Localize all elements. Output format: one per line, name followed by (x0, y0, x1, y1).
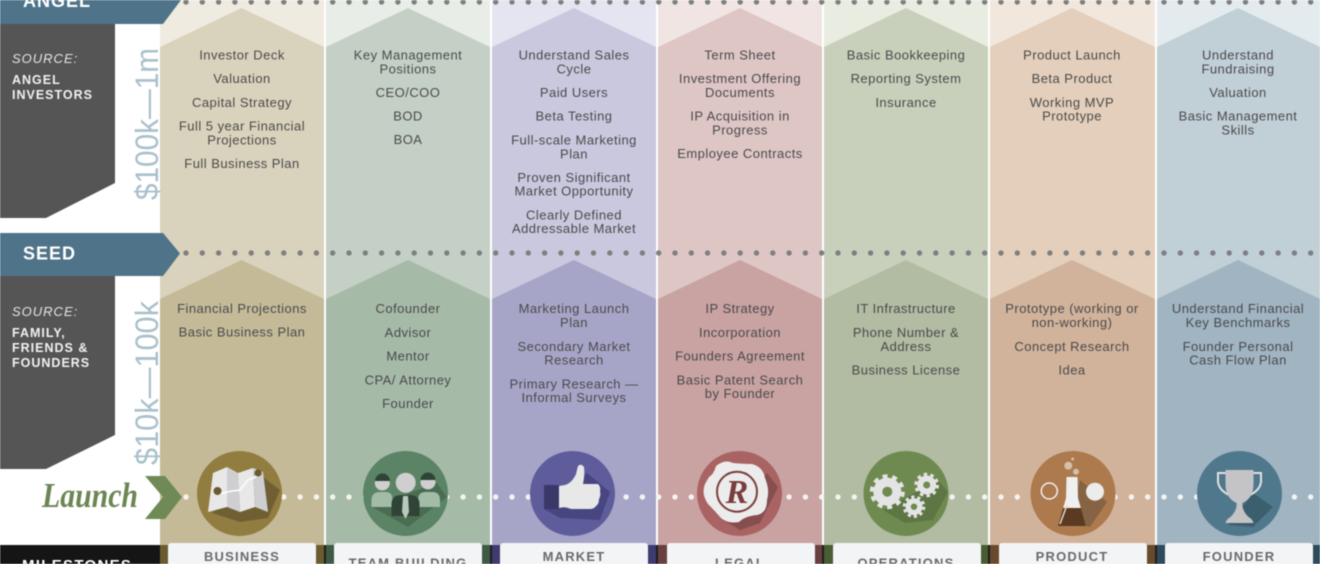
text: market research seed items: Informal Surveys (521, 390, 627, 405)
text: market research angel items: Proven Significant (517, 170, 631, 185)
text: market research angel items: Plan (560, 146, 588, 162)
text: market research angel items: Paid Users (540, 85, 608, 100)
card: market: MARKET (543, 549, 605, 564)
panel: angel source: INVESTORS (12, 88, 93, 102)
card: business: BUSINESS (204, 549, 280, 564)
text: team building seed items: Founder (382, 396, 434, 411)
text: team building angel items: BOA (394, 132, 422, 147)
text: operations angel items: Insurance (875, 95, 937, 110)
text: team building seed items: Mentor (386, 348, 430, 364)
text: business plan seed items: Basic Business Plan (179, 324, 305, 340)
text: operations seed items: IT Infrastructure (856, 301, 956, 316)
column: operations (824, 0, 988, 545)
text: legal seed items: IP Strategy (705, 301, 775, 316)
text: market research angel items: Beta Testing (536, 108, 612, 124)
panel: angel source (0, 24, 115, 218)
banner: angel (0, 0, 181, 24)
text: market research seed items: Plan (560, 315, 588, 330)
text: product seed items: non-working) (1032, 315, 1112, 330)
text: team building seed items: CPA/ Attorney (365, 372, 451, 388)
panel: angel source: SOURCE: (12, 51, 78, 66)
card: business (168, 543, 316, 564)
card: legal (667, 543, 815, 564)
text: legal angel items: IP Acquisition in (690, 108, 790, 124)
text: product seed items: Idea (1058, 362, 1086, 378)
bar: milestones (0, 545, 160, 564)
text: operations seed items: Phone Number & (853, 325, 959, 340)
icon: team (363, 451, 448, 536)
icon: map (197, 451, 282, 536)
dotted line: angel stage (186, 0, 1320, 5)
text: legal angel items (677, 48, 803, 161)
text: market research angel items (511, 48, 637, 236)
text: market research seed items: Research (544, 352, 604, 368)
milestone strips (160, 545, 1320, 564)
text: team building angel items: BOD (393, 108, 423, 124)
icon: flask (1030, 451, 1116, 536)
text: legal seed items: Basic Patent Search (677, 372, 803, 388)
text: founder angel items: Skills (1221, 122, 1255, 138)
label: launch: Launch (41, 476, 138, 515)
text: team building angel items: Key Management (354, 48, 462, 62)
icon: thumbs up (530, 451, 615, 536)
text: legal angel items: Employee Contracts (677, 146, 803, 161)
text: market research seed items (509, 301, 639, 405)
text: product seed items (1005, 301, 1139, 378)
icon: gears (864, 451, 948, 536)
text: legal seed items (675, 301, 805, 401)
text: legal angel items: Term Sheet (704, 48, 776, 62)
text: team building angel items: CEO/COO (376, 85, 440, 100)
text: business plan angel items: Projections (207, 132, 277, 148)
panel: seed source: FRIENDS & (12, 341, 88, 355)
text: operations angel items: Reporting System (851, 71, 961, 86)
text: team building seed items (365, 301, 451, 411)
column: legal (658, 0, 822, 545)
text: founder angel items (1179, 48, 1297, 138)
arrow: launch chevron (145, 476, 182, 519)
text: market research seed items: Secondary Market (517, 339, 631, 354)
icon: wax seal: R (725, 474, 748, 511)
text: legal seed items: Founders Agreement (675, 348, 805, 364)
text: operations angel items (847, 48, 965, 110)
text: market research angel items: Market Opportunity (514, 184, 634, 198)
amount: seed range: $10k—100k (129, 300, 165, 465)
text: founder seed items: Understand Financial (1172, 301, 1304, 316)
text: business plan angel items: Investor Deck (199, 48, 285, 62)
text: business plan seed items: Financial Projections (177, 301, 307, 316)
panel: angel source: ANGEL (12, 73, 61, 87)
text: operations seed items (852, 301, 960, 378)
text: product angel items: Working MVP (1030, 95, 1114, 110)
text: founder angel items: Understand (1202, 48, 1274, 62)
panel: seed source: FAMILY, (12, 326, 66, 340)
text: founder angel items: Valuation (1209, 85, 1267, 100)
amount: angel range: $100k—1m (129, 48, 165, 200)
dotted line: seed stage (186, 250, 1320, 256)
card: product (999, 543, 1147, 564)
column: business plan (160, 0, 324, 545)
card: team building (334, 543, 482, 564)
text: founder seed items: Cash Flow Plan (1189, 352, 1287, 368)
text: founder seed items: Key Benchmarks (1186, 315, 1290, 330)
text: founder angel items: Basic Management (1179, 108, 1297, 124)
text: legal seed items: by Founder (705, 386, 775, 401)
text: founder angel items: Fundraising (1201, 62, 1275, 76)
text: legal seed items: Incorporation (699, 325, 781, 340)
text: business plan angel items (179, 48, 305, 171)
icon: wax seal (697, 451, 782, 536)
text: product angel items: Prototype (1042, 108, 1102, 124)
text: team building seed items: Advisor (385, 325, 432, 340)
icon: trophy (1197, 451, 1282, 536)
text: business plan angel items: Valuation (213, 71, 271, 86)
text: team building seed items: Cofounder (376, 301, 441, 316)
text: product seed items: Prototype (working or (1005, 301, 1139, 316)
text: market research seed items: Primary Research — (509, 376, 639, 392)
panel: seed source (0, 276, 115, 469)
banner: seed: SEED (23, 244, 76, 264)
banner: seed (0, 233, 180, 276)
column: team building (326, 0, 490, 545)
text: operations seed items: Business License (852, 362, 960, 378)
text: legal angel items: Investment Offering (679, 71, 801, 86)
text: product angel items: Product Launch (1023, 48, 1121, 62)
panel: seed source: FOUNDERS (12, 356, 90, 370)
card: market (500, 543, 648, 564)
text: operations angel items: Basic Bookkeeping (847, 48, 965, 62)
text: market research angel items: Addressable Market (512, 221, 636, 236)
column: founder (1157, 0, 1320, 545)
text: business plan angel items: Full 5 year Financial (179, 118, 305, 134)
text: product angel items (1023, 48, 1121, 124)
card: product: PRODUCT (1036, 549, 1108, 564)
text: product seed items: Concept Research (1014, 339, 1130, 354)
card: founder: FOUNDER (1203, 549, 1275, 564)
dotted line: launch (186, 494, 1320, 500)
text: business plan angel items: Full Business Plan (184, 156, 300, 171)
text: team building angel items: Positions (380, 62, 437, 76)
card: founder (1165, 543, 1313, 564)
text: business plan seed items (177, 301, 307, 340)
text: team building angel items (354, 48, 462, 147)
text: operations seed items: Address (881, 339, 932, 354)
text: legal angel items: Progress (712, 122, 768, 138)
column: product (990, 0, 1155, 545)
column: market research (492, 0, 656, 545)
text: market research angel items: Clearly Defined (526, 208, 622, 222)
panel: seed source: SOURCE: (12, 304, 78, 319)
text: market research angel items: Cycle (557, 62, 591, 76)
text: market research angel items: Understand Sales (519, 48, 629, 62)
text: legal angel items: Documents (705, 85, 775, 100)
text: founder seed items: Founder Personal (1183, 339, 1293, 354)
card: operations (833, 543, 981, 564)
text: market research seed items: Marketing Launch (519, 301, 629, 316)
text: market research angel items: Full-scale Marketing (511, 132, 637, 148)
text: business plan angel items: Capital Strategy (192, 95, 292, 110)
text: product angel items: Beta Product (1032, 71, 1112, 86)
text: founder seed items (1172, 301, 1304, 368)
